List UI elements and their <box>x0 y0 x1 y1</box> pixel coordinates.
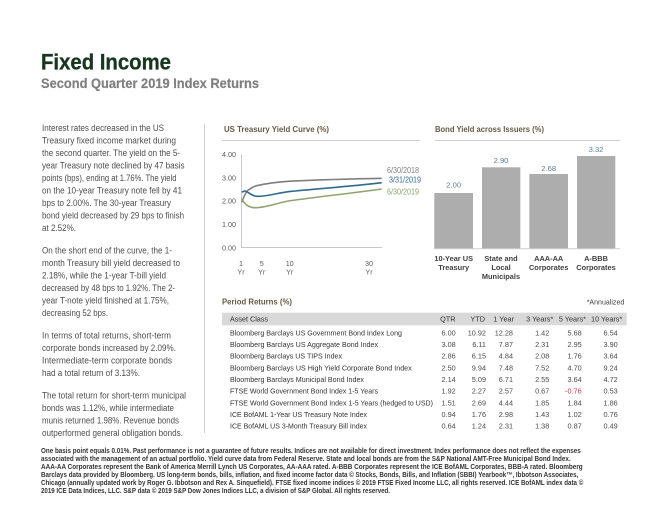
table column: 10 Years: 1.86 <box>603 398 618 407</box>
footnote disclosure: Barclays data provided by Bloomberg. US long-term bonds, bills, inflation, and fixed income factor data © Stocks, Bonds, Bills, and Inflation (SBBI) Yearbook™, Ibbotson Associates, <box>41 471 578 479</box>
x axis labels: Yr <box>365 268 373 276</box>
table column: QTR: 1.51 <box>441 398 456 407</box>
x axis labels: Yr <box>237 268 245 276</box>
table column: 10 Years: 9.24 <box>603 363 618 372</box>
table row names: Bloomberg Barclays US Government Bond Index Long <box>230 328 402 337</box>
bar values: 2.00 <box>446 180 461 190</box>
panel: US Treasury yield curve <box>222 124 421 276</box>
table column: 3 Years: 7.52 <box>535 363 549 372</box>
table column: YTD: 2.69 <box>472 398 486 407</box>
x axis labels: 5 <box>260 259 264 268</box>
table column: YTD: 10.92 <box>468 328 486 337</box>
text block: market commentary: 2.18%, while the 1-year T-bill yield <box>42 271 166 282</box>
bar category labels: Local <box>491 263 511 272</box>
footnote disclosure <box>41 448 584 495</box>
footnote disclosure: 2019 ICE Data Indices, LLC. S&P data © 2019 S&P Dow Jones Indices LLC, a division of S&P Global. All rights reserved. <box>41 487 390 495</box>
table column: 5 Years: 3.64 <box>567 375 582 384</box>
bar: State and Local Municipals <box>482 167 520 248</box>
table column: 5 Years: -0.76 <box>565 387 582 396</box>
table column: YTD <box>468 328 486 431</box>
line: 6/30/2019 curve <box>242 189 382 208</box>
bar category labels: Corporates <box>529 263 568 272</box>
table column: YTD: 9.94 <box>472 363 486 372</box>
text block: market commentary: had a total return of 3.13%. <box>42 368 140 379</box>
table column: 10 Years: 3.64 <box>603 352 618 361</box>
table column: QTR: 3.08 <box>441 340 456 349</box>
bar values: 2.68 <box>541 164 556 173</box>
table column: 3 Years: 1.42 <box>535 328 549 337</box>
table column: YTD: 6.15 <box>472 352 486 361</box>
table header: QTR <box>440 315 456 324</box>
table column: YTD: 1.24 <box>472 422 486 431</box>
text block: market commentary: On the short end of the curve, the 1- <box>42 245 172 256</box>
y axis labels: 2.00 <box>222 196 236 206</box>
table row names: Bloomberg Barclays US TIPS Index <box>230 352 342 361</box>
table row names: FTSE World Government Bond Index 1-5 Years <box>230 387 378 396</box>
table row names: ICE BofAML 1-Year US Treasury Note Index <box>230 410 367 419</box>
panel: period returns table <box>222 296 627 431</box>
table column: 3 Years <box>535 328 549 431</box>
table column: QTR: 1.92 <box>441 387 456 396</box>
legend: 6/30/2019: 6/30/2019 <box>387 188 419 197</box>
table column: 10 Years: 0.53 <box>603 387 618 396</box>
table column: 1 Year: 2.98 <box>499 410 513 419</box>
heading: yield curve: US Treasury Yield Curve (%) <box>224 124 329 134</box>
table column: YTD: 6.11 <box>472 340 486 349</box>
table column: 3 Years: 1.38 <box>535 422 549 431</box>
y axis labels: 3.00 <box>222 174 236 182</box>
table column: 5 Years: 1.84 <box>567 398 582 407</box>
subtitle: Second Quarter 2019 Index Returns <box>41 75 259 91</box>
table column: 5 Years: 0.87 <box>567 422 582 431</box>
text block: market commentary: munis returned 1.98%. Revenue bonds <box>42 416 179 427</box>
table row names: ICE BofAML US 3-Month Treasury Bill Index <box>230 422 367 431</box>
bar: 10-Year US Treasury <box>434 193 473 248</box>
table column: 5 Years: 1.02 <box>567 410 582 419</box>
table column: QTR: 2.50 <box>441 363 456 372</box>
x axis labels: Yr <box>286 268 294 276</box>
bar values: 2.90 <box>494 156 508 165</box>
text block: market commentary: decreased by 48 bps to 1.92%. The 2- <box>42 283 175 294</box>
table column: 1 Year: 6.71 <box>499 375 513 384</box>
y axis labels: 1.00 <box>222 220 236 229</box>
x axis labels: Yr <box>258 268 266 276</box>
table column: 10 Years: 4.72 <box>603 375 618 384</box>
table column: QTR: 0.64 <box>441 422 456 431</box>
table column: QTR: 2.86 <box>441 352 456 361</box>
table column: 1 Year: 2.31 <box>499 422 513 431</box>
table column: 1 Year <box>495 328 513 431</box>
heading: bond yield: Bond Yield across Issuers (%) <box>435 124 544 134</box>
table column: 1 Year: 7.87 <box>499 340 513 349</box>
table column: 10 Years: 3.90 <box>603 340 618 349</box>
title: Fixed Income <box>41 50 171 74</box>
table column: QTR: 2.14 <box>441 375 456 384</box>
text block: market commentary: the second quarter. The yield on the 5- <box>42 148 180 159</box>
bar: AAA-AA Corporates <box>529 174 568 248</box>
bar category labels: Corporates <box>576 263 616 272</box>
x axis labels: 10 <box>286 259 294 268</box>
text block: market commentary: year T-note yield finished at 1.75%, <box>42 296 169 307</box>
text block: market commentary: points (bps), ending at 1.76%. The yield <box>42 173 176 184</box>
y axis labels <box>222 150 236 252</box>
table header: 1 Year <box>493 315 515 324</box>
footnote disclosure: Chicago (annually updated work by Roger G. Ibbotson and Rex A. Sinquefield). FTSE fixed income indices © 2019 FTSE Fixed Income LLC, all rights reserved. ICE BofAML index data © <box>41 479 584 487</box>
text block: market commentary: Intermediate-term corporate bonds <box>42 356 172 367</box>
table column: 5 Years: 5.68 <box>567 328 582 337</box>
bar category labels: Treasury <box>438 263 470 272</box>
table header: 5 Years* <box>559 315 586 324</box>
text block: market commentary: bps to 2.00%. The 30-year Treasury <box>42 198 171 209</box>
table column: 10 Years: 0.49 <box>603 422 618 431</box>
text block: market commentary: The total return for short-term municipal <box>42 391 186 402</box>
bar category labels: State and <box>484 254 518 263</box>
table column: 1 Year: 7.48 <box>499 363 513 372</box>
table header <box>222 313 627 325</box>
table column: 5 Years: 4.70 <box>567 363 582 372</box>
table column: 3 Years: 2.55 <box>535 375 549 384</box>
table header: Asset Class <box>230 315 268 324</box>
footnote disclosure: One basis point equals 0.01%. Past performance is not a guarantee of future results. Indices are not available for direct investment. Index performance does not reflect the expenses <box>41 448 581 455</box>
table column: 1 Year: 4.44 <box>499 398 513 407</box>
text block: market commentary: In terms of total returns, short-term <box>42 331 171 342</box>
text block: market commentary: at 2.52%. <box>42 223 76 234</box>
bar category labels: A-BBB <box>584 254 608 263</box>
text block: market commentary: month Treasury bill yield decreased to <box>42 258 180 269</box>
text block: market commentary: Treasury fixed income market during <box>42 136 176 147</box>
table header: 10 Years* <box>591 315 622 324</box>
footnote disclosure: AAA-AA Corporates represent the Bank of America Merrill Lynch US Corporates, AA-AAA rated. A-BBB Corporates represent the ICE BofAML Corporates, BBB-A rated. Bloomberg <box>41 464 583 471</box>
note: annualized: *Annualized <box>587 297 624 306</box>
table column: 10 Years: 0.76 <box>603 410 618 419</box>
bar values: 3.32 <box>589 145 603 154</box>
table column: 3 Years: 1.43 <box>535 410 549 419</box>
text block: market commentary <box>42 123 186 439</box>
table column: YTD: 1.76 <box>472 410 486 419</box>
table column: 5 Years: 1.76 <box>567 352 582 361</box>
table column: QTR <box>441 328 456 431</box>
table column: 3 Years: 1.85 <box>535 398 549 407</box>
table column: 1 Year: 4.84 <box>499 352 513 361</box>
legend: 6/30/2018: 6/30/2018 <box>387 166 419 175</box>
legend: 3/31/2019: 3/31/2019 <box>389 176 421 185</box>
table column: 1 Year: 2.57 <box>499 387 513 396</box>
text block: market commentary: corporate bonds increased by 2.09%. <box>42 343 176 354</box>
panel: bond yield across issuers <box>434 124 620 281</box>
x axis labels <box>237 259 373 276</box>
text block: market commentary: decreasing 52 bps. <box>42 308 108 319</box>
line: 3/31/2019 curve <box>242 183 382 196</box>
table row names: FTSE World Government Bond Index 1-5 Years (hedged to USD) <box>230 398 433 407</box>
y axis labels: 0.00 <box>222 243 236 252</box>
bar values <box>446 145 603 190</box>
table column: 10 Years: 6.54 <box>603 328 618 337</box>
table row names: Bloomberg Barclays US High Yield Corporate Bond Index <box>230 363 412 372</box>
text block: market commentary: outperformed general obligation bonds. <box>42 428 183 439</box>
table column: YTD: 2.27 <box>472 387 486 396</box>
line: 6/30/2018 curve <box>242 178 382 202</box>
bar category labels <box>434 254 616 281</box>
x axis labels: 30 <box>365 259 373 268</box>
table column: 5 Years <box>565 328 582 431</box>
table column: YTD: 5.09 <box>472 375 486 384</box>
table row names <box>230 328 433 431</box>
text block: market commentary: Interest rates decreased in the US <box>42 123 164 134</box>
footnote disclosure: associated with the management of an actual portfolio. Yield curve data from Federal Reserve. State and local bonds are from the S&P National AMT-Free Municipal Bond Index. <box>41 456 571 463</box>
heading: period returns: Period Returns (%) <box>222 296 292 306</box>
table column: 3 Years: 2.08 <box>535 352 549 361</box>
bar category labels: 10-Year US <box>434 254 473 263</box>
table row names: Bloomberg Barclays US Aggregate Bond Index <box>230 340 378 349</box>
bar category labels: Municipals <box>482 272 520 281</box>
table header: 3 Years* <box>526 315 553 324</box>
table column: 10 Years <box>603 328 618 431</box>
text block: market commentary: on the 10-year Treasury note fell by 41 <box>42 186 182 197</box>
bar category labels: AAA-AA <box>534 254 564 263</box>
text block: market commentary: bond yield decreased by 29 bps to finish <box>42 211 184 222</box>
table column: 5 Years: 2.95 <box>567 340 582 349</box>
table column: QTR: 6.00 <box>441 328 456 337</box>
y axis labels: 4.00 <box>222 150 236 159</box>
table column: 3 Years: 2.31 <box>535 340 549 349</box>
table row names: Bloomberg Barclays Municipal Bond Index <box>230 375 364 384</box>
text block: market commentary: year Treasury note declined by 47 basis <box>42 161 185 172</box>
table column: 1 Year: 12.28 <box>495 328 513 337</box>
table column: 3 Years: 0.67 <box>535 387 549 396</box>
table column: QTR: 0.94 <box>441 410 456 419</box>
text block: market commentary: bonds was 1.12%, while intermediate <box>42 403 174 414</box>
bar: A-BBB Corporates <box>577 156 615 248</box>
table header: YTD <box>470 315 485 324</box>
x axis labels: 1 <box>239 259 243 268</box>
